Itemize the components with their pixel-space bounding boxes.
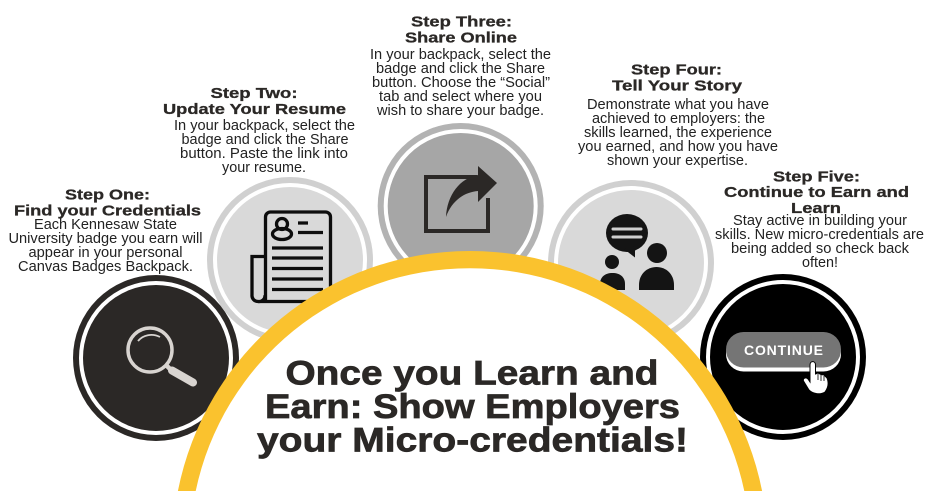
panel: step four xyxy=(548,62,778,346)
text: step two description: badge and click the Share xyxy=(182,132,349,148)
text: step four description xyxy=(578,97,778,169)
heading: step four xyxy=(612,62,743,94)
heading: step four: Step Four: xyxy=(631,62,722,78)
badge circle: step three xyxy=(378,123,544,289)
icon: people talking xyxy=(600,214,674,290)
heading: step three xyxy=(405,14,517,46)
text: step one description: appear in your personal xyxy=(28,245,182,261)
icon: magnifying glass xyxy=(128,328,193,382)
text: step two description: In your backpack, select the xyxy=(174,118,355,134)
text: step three description: badge and click the Share xyxy=(376,61,545,77)
icon: resume document xyxy=(252,212,330,302)
text: step one description: University badge you earn will xyxy=(8,231,202,247)
text: step two description: button. Paste the link into xyxy=(180,146,348,162)
text: step two description xyxy=(174,118,355,176)
text: step three description: wish to share your badge. xyxy=(376,103,544,119)
text: step three description: button. Choose the “Social” xyxy=(372,75,550,91)
heading: step five: Step Five: xyxy=(773,168,860,186)
heading: step four: Tell Your Story xyxy=(612,78,743,94)
title: your Micro-credentials! xyxy=(257,422,688,460)
text: step four description: Demonstrate what you have xyxy=(587,97,769,113)
heading: step five: Learn xyxy=(791,200,841,217)
text: step five description: being added so check back xyxy=(731,241,910,257)
text: step five description: skills. New micro-credentials are xyxy=(715,227,924,243)
panel: step three xyxy=(370,14,551,289)
title: Once you Learn and xyxy=(286,354,658,392)
badge circle: step four xyxy=(548,180,714,346)
heading: step one: Find your Credentials xyxy=(14,202,201,220)
icon: continue button with hand cursor: CONTINUE xyxy=(744,342,823,358)
title: Earn: Show Employers xyxy=(265,388,680,426)
text: step five description xyxy=(715,213,924,271)
text: step one description: Canvas Badges Backpack. xyxy=(18,259,193,275)
heading: step one xyxy=(14,186,201,220)
text: step two description: your resume. xyxy=(222,160,306,176)
heading: step three: Share Online xyxy=(405,30,517,46)
heading: step three: Step Three: xyxy=(411,14,512,30)
text: step four description: shown your expertise. xyxy=(607,153,748,169)
heading: step two: Update Your Resume xyxy=(163,101,346,118)
badge circle: step one xyxy=(73,275,239,441)
text: step five description: often! xyxy=(802,255,838,271)
text: step one description: Each Kennesaw State xyxy=(34,217,177,233)
title xyxy=(257,354,688,460)
text: step one description xyxy=(8,217,202,275)
text: step three description xyxy=(370,47,551,119)
panel: step one xyxy=(8,186,239,441)
icon: continue button with hand cursor xyxy=(726,332,841,394)
badge circle: step five xyxy=(700,274,866,440)
panel: step five xyxy=(700,168,924,440)
heading: step two: Step Two: xyxy=(210,85,298,102)
yellow arch panel xyxy=(178,251,762,491)
text: step five description: Stay active in building your xyxy=(733,213,907,229)
text: step four description: skills learned, the experience xyxy=(584,125,772,141)
text: step four description: you earned, and how you have xyxy=(578,139,778,155)
badge circle: step two xyxy=(207,177,373,343)
heading: step five: Continue to Earn and xyxy=(724,184,909,201)
icon: share arrow xyxy=(426,166,497,231)
heading: step two xyxy=(163,85,346,118)
panel: step two xyxy=(163,85,373,343)
text: step three description: In your backpack, select the xyxy=(370,47,551,63)
heading: step five xyxy=(724,168,909,217)
text: step three description: tab and select where you xyxy=(379,89,542,105)
text: step four description: achieved to employers: the xyxy=(592,111,765,127)
heading: step one: Step One: xyxy=(65,186,150,204)
